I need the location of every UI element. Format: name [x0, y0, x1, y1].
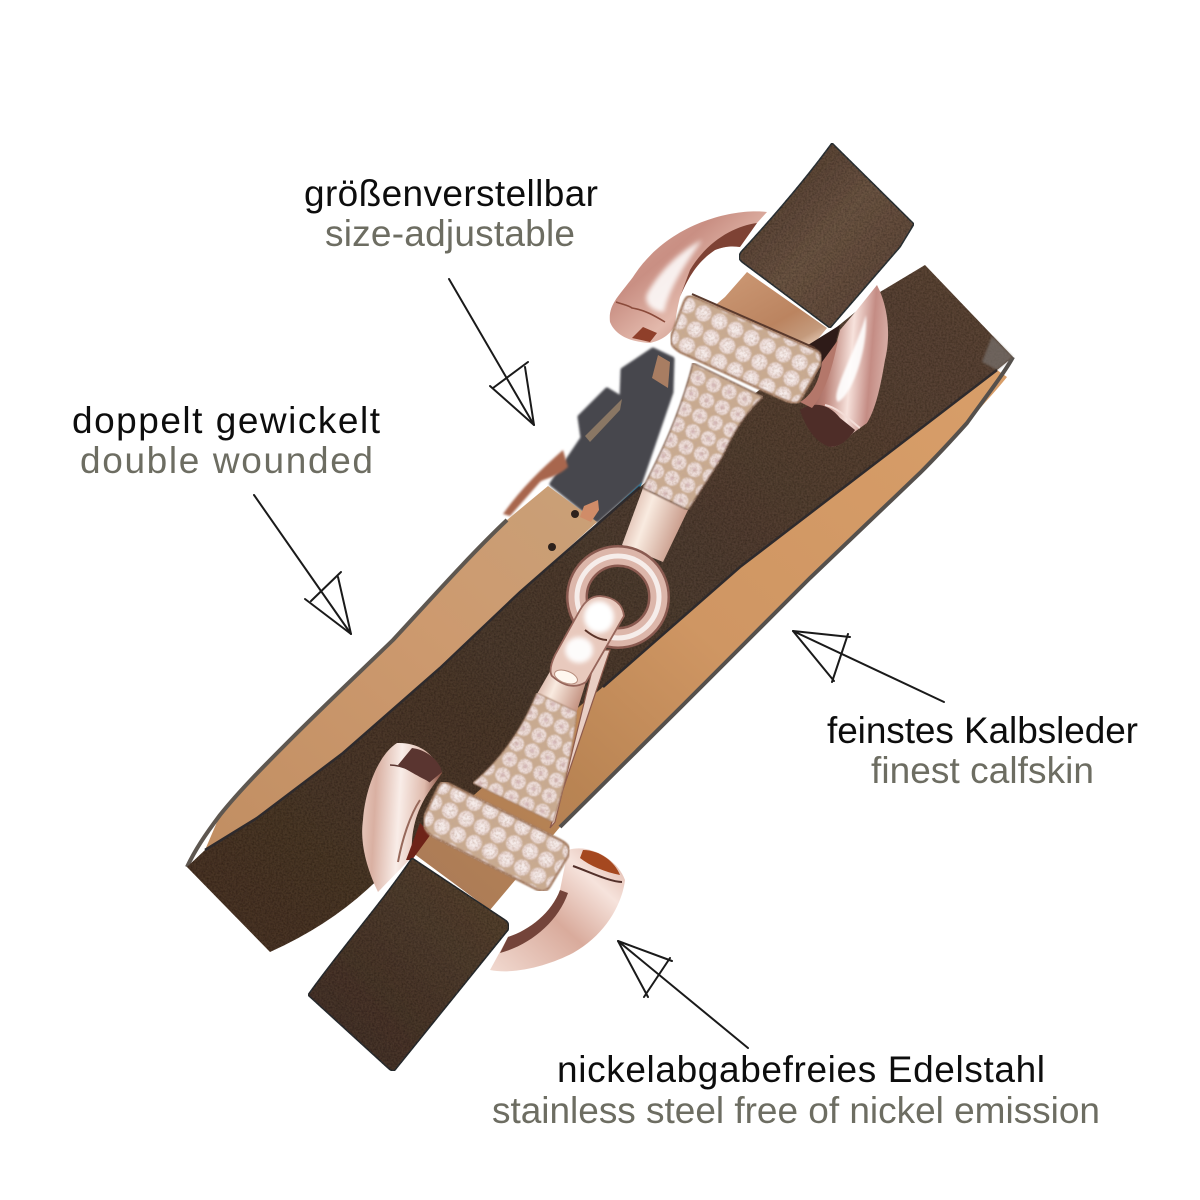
clasp lower: loop pill	[551, 596, 624, 687]
heading: size-adjustable label: größenverstellbar	[304, 173, 598, 214]
heading: stainless steel label: stainless steel free of nickel emission	[492, 1090, 1100, 1131]
heading: double wound label	[72, 400, 381, 481]
leather tab: top end	[739, 143, 914, 328]
heading: calfskin label	[827, 710, 1138, 791]
heading: size-adjustable label	[304, 173, 598, 254]
clasp lower: left horn	[362, 743, 442, 892]
arrow: calfskin	[793, 631, 944, 702]
clasp top: metal stem below pave	[622, 488, 688, 562]
clasp lower: pave block	[424, 782, 569, 891]
heading: double wound label: double wounded	[80, 440, 373, 481]
strap: upper tan patch	[700, 272, 827, 345]
strap: dark seam lines	[205, 370, 997, 850]
heading: stainless steel label: nickelabgabefreies Edelstahl	[557, 1049, 1045, 1090]
rose nub on buckle	[580, 500, 599, 522]
clasp lower: metal stem and strip	[537, 650, 610, 828]
clasp centre: ring	[577, 556, 659, 638]
stitch holes	[548, 510, 579, 551]
heading: calfskin label: feinstes Kalbsleder	[827, 710, 1138, 751]
bracelet	[187, 143, 1013, 1071]
strap: worn outer edge left	[187, 520, 507, 867]
strap: tan inner left band	[205, 486, 597, 850]
strap: grey worn tip	[982, 336, 1013, 370]
heading: double wound label: doppelt gewickelt	[72, 400, 381, 441]
clasp lower: right horn	[490, 848, 625, 971]
arrow: double wound	[254, 495, 351, 634]
back buckle: dark keeper and loops	[503, 350, 672, 527]
clasp lower: pave stem	[473, 693, 577, 822]
clasp top: right horn	[800, 285, 888, 447]
heading: calfskin label: finest calfskin	[871, 750, 1094, 791]
arrow: size-adjustable	[449, 279, 534, 425]
heading: stainless steel label	[492, 1049, 1100, 1131]
arrow: stainless steel	[618, 941, 748, 1048]
clasp top: left horn	[610, 211, 767, 343]
strap: worn outer edge right	[560, 357, 1013, 827]
clasp top: pave stem	[643, 363, 763, 510]
clasp top: block dark top rim	[692, 294, 815, 348]
clasp top: pave block	[671, 296, 821, 403]
heading: size-adjustable label: size-adjustable	[325, 213, 575, 254]
strap: tan inner right band	[413, 370, 1007, 910]
leather tab: bottom end	[308, 858, 509, 1071]
strap: dark leather middle band	[187, 265, 1013, 952]
